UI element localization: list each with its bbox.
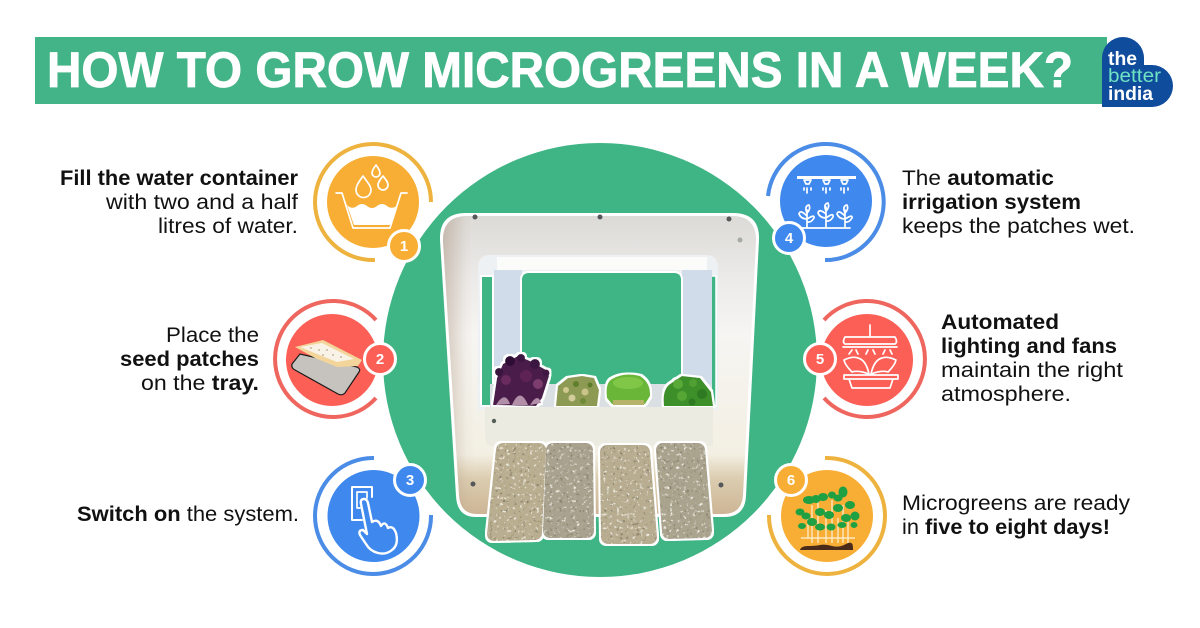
badge 2: 2 bbox=[376, 351, 384, 368]
bright green microgreens bbox=[607, 375, 650, 405]
icon: microgreens sprouting from soil bbox=[796, 486, 860, 550]
step 4: text: irrigation system bbox=[902, 191, 1081, 214]
badge 4: 4 bbox=[785, 230, 794, 247]
inner opening and lamp bar bbox=[478, 255, 718, 410]
logo: the better india: india bbox=[1108, 84, 1153, 105]
title banner: HOW TO GROW MICROGREENS IN A WEEK? bbox=[47, 42, 1073, 98]
badge 5: 5 bbox=[816, 351, 824, 368]
badge 6: 6 bbox=[787, 472, 795, 489]
shelf bbox=[485, 407, 713, 446]
step 1: icon bbox=[315, 144, 431, 262]
step 3: icon bbox=[315, 458, 431, 574]
seed patches bbox=[494, 450, 705, 537]
photo: microgreens growing unit bbox=[440, 213, 759, 537]
icon: irrigation sprinklers over plants bbox=[797, 176, 856, 228]
icon: seed patch on tray bbox=[292, 340, 362, 395]
step 6: text: Microgreens are ready bbox=[902, 492, 1131, 515]
logo: the better india: the bbox=[1108, 49, 1137, 70]
step 5: text: atmosphere. bbox=[941, 383, 1071, 406]
microgreen clusters bbox=[493, 354, 713, 406]
step 5: text: maintain the right bbox=[941, 359, 1123, 382]
logo: the better india bbox=[1102, 37, 1173, 107]
step 5: text: Automated bbox=[941, 311, 1059, 334]
step 6: icon bbox=[769, 458, 885, 574]
step 2: text bbox=[120, 324, 259, 395]
step 4: icon bbox=[768, 144, 884, 260]
step 2: text: on the tray. bbox=[141, 372, 259, 395]
step 6: text: in five to eight days! bbox=[902, 516, 1110, 539]
step 3: text: Switch on the system. bbox=[77, 503, 299, 526]
purple microgreens bbox=[493, 354, 550, 406]
icon: basin with water drops bbox=[336, 165, 407, 228]
logo: the better india: better bbox=[1108, 66, 1162, 87]
step 5: text bbox=[941, 311, 1123, 406]
step 4: text: The automatic bbox=[902, 167, 1054, 190]
central green circle bbox=[383, 143, 817, 577]
step 5: icon bbox=[804, 301, 925, 417]
unit frame bbox=[440, 213, 759, 517]
step 1: text: Fill the water container bbox=[60, 167, 298, 190]
step 4: text: keeps the patches wet. bbox=[902, 215, 1135, 238]
step 1: text bbox=[60, 167, 298, 238]
badge 3: 3 bbox=[406, 472, 414, 489]
icon: finger pressing switch bbox=[352, 487, 397, 554]
dark green microgreens bbox=[664, 376, 713, 406]
icon: grow lamp over plant tray bbox=[843, 325, 898, 388]
step 1: text: litres of water. bbox=[158, 215, 298, 238]
step 1: text: with two and a half bbox=[105, 191, 298, 214]
pale green microgreens bbox=[556, 376, 599, 406]
step 2: icon bbox=[275, 301, 396, 417]
frame screws bbox=[470, 214, 742, 488]
badge 1: 1 bbox=[400, 238, 408, 255]
step 6: text bbox=[902, 492, 1131, 539]
step 4: text bbox=[902, 167, 1135, 238]
step 5: text: lighting and fans bbox=[941, 335, 1117, 358]
step 2: text: Place the bbox=[166, 324, 259, 347]
step 2: text: seed patches bbox=[120, 348, 259, 371]
